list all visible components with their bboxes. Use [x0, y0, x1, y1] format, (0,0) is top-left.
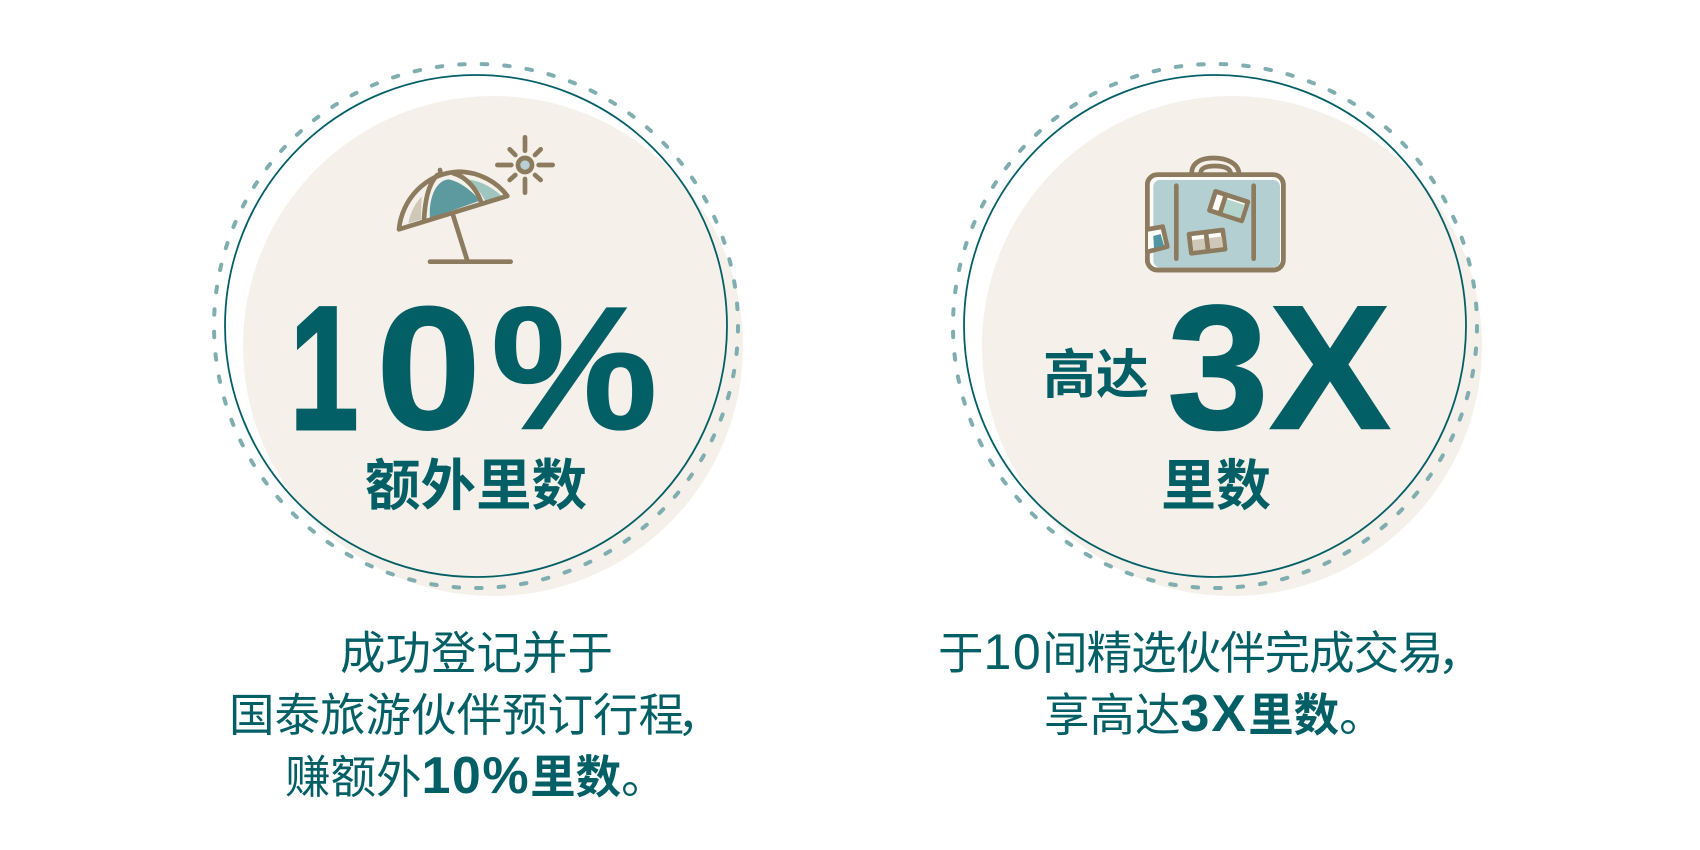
label: 额外里数: 额外里数	[365, 455, 587, 517]
thin teal circle	[225, 75, 727, 577]
dashed teal circle	[953, 64, 1477, 588]
text block: left description	[229, 628, 723, 805]
line 2: 国泰旅游伙伴预订行程，	[229, 690, 723, 741]
panel: 3X miles	[953, 64, 1482, 596]
text block: right description	[938, 624, 1483, 743]
label: 里数: 里数	[1161, 455, 1271, 517]
thin teal circle	[964, 75, 1466, 577]
big number 3X: 3X	[1167, 268, 1391, 466]
big number 10%: 1	[290, 271, 358, 467]
line 2: 享高达3X里数。	[1044, 685, 1385, 743]
line 3: 赚额外10%里数。	[285, 747, 667, 805]
big number 10%	[290, 270, 657, 467]
big number 10%: %	[491, 271, 657, 466]
panel: 10% extra miles	[214, 64, 743, 596]
icon: suitcase with stickers	[1147, 158, 1283, 270]
big number 10%: 0	[376, 270, 481, 466]
beige offset disc	[243, 96, 743, 596]
dashed teal circle	[214, 64, 738, 588]
line 1: 成功登记并于	[340, 628, 613, 679]
icon: beach umbrella and sun	[399, 137, 553, 262]
beige offset disc	[982, 96, 1482, 596]
line 1: 于10间精选伙伴完成交易，	[938, 624, 1483, 680]
label: 高达: 高达	[1043, 346, 1149, 405]
